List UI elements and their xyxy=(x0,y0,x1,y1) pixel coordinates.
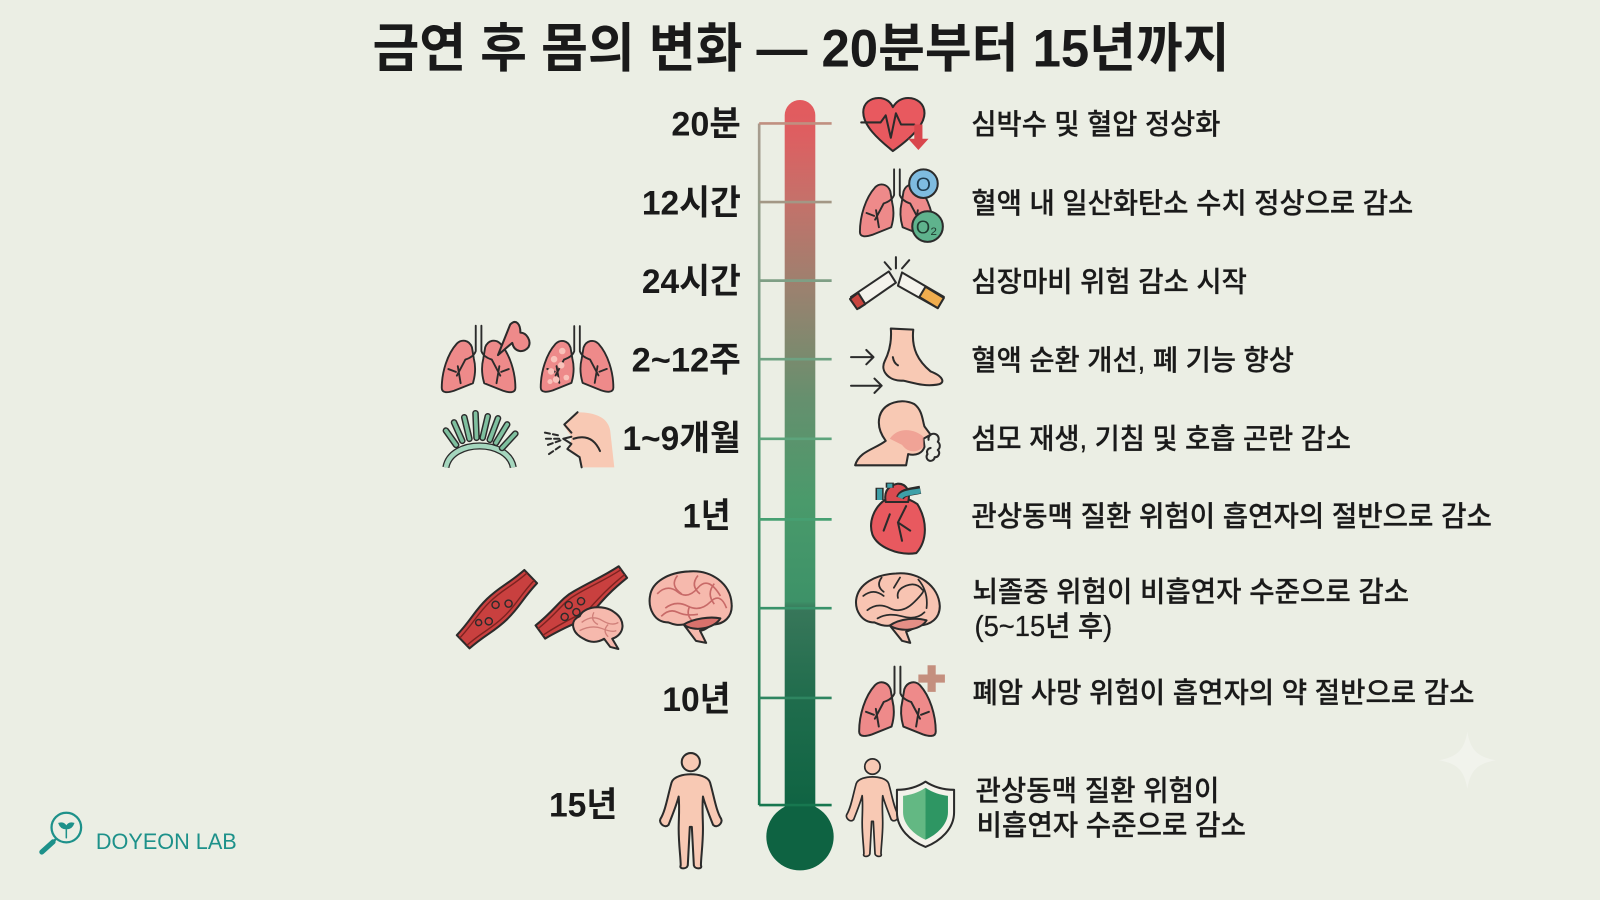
left rail xyxy=(758,123,760,805)
icon: brain right xyxy=(856,573,940,643)
shield xyxy=(897,782,954,847)
label: 24시간: 24시간 xyxy=(642,262,741,301)
icon: nose and mouth profile xyxy=(545,412,614,467)
icon: broken cigarette xyxy=(850,257,944,309)
text: 10 years: 폐암 사망 위험이 흡연자의 약 절반으로 감소 xyxy=(972,678,1474,710)
title: 금연 후 몸의 변화 — 20분부터 15년까지 xyxy=(372,19,1230,78)
logo: DOYEON LAB xyxy=(42,813,237,854)
text: 20 minutes: 심박수 및 혈압 정상화 xyxy=(971,109,1220,141)
text: 24 hours: 심장마비 위험 감소 시작 xyxy=(971,266,1247,298)
text: 15 years: 관상동맥 질환 위험이 xyxy=(976,776,1219,808)
text: 12 hours: 혈액 내 일산화탄소 수치 정상으로 감소 xyxy=(971,188,1413,220)
icon: person xyxy=(660,753,722,868)
icon: person with shield xyxy=(846,759,954,856)
tick marks xyxy=(759,123,832,805)
text: 1-9 months: 섬모 재생, 기침 및 호흡 곤란 감소 xyxy=(971,423,1351,455)
label: 12시간: 12시간 xyxy=(642,183,741,222)
text: 15 years xyxy=(976,776,1246,842)
O2 bubble: O₂ xyxy=(916,217,937,238)
icon: head breathing out xyxy=(855,401,940,465)
icon: foot with circulation arrows xyxy=(851,329,942,393)
thermometer bulb xyxy=(766,803,834,870)
text: 15 years: 비흡연자 수준으로 감소 xyxy=(977,810,1246,842)
label: 1년: 1년 xyxy=(683,498,731,536)
label: 1~9개월: 1~9개월 xyxy=(622,420,741,458)
label: 15년: 15년 xyxy=(549,786,617,824)
logo icon: magnifier with sprout xyxy=(42,813,81,852)
thermometer tube xyxy=(785,100,815,816)
O bubble: O xyxy=(916,174,931,196)
icon: lungs with oxygen bubbles xyxy=(860,169,943,242)
icon: brain left xyxy=(650,571,732,643)
icon: cilia xyxy=(446,413,515,467)
text: 2-12 weeks: 혈액 순환 개선, 폐 기능 향상 xyxy=(971,345,1294,377)
icon: lungs in recovery left xyxy=(442,322,529,392)
icon: heart with ECG and down arrow xyxy=(861,98,929,151)
label: 20분: 20분 xyxy=(671,106,741,144)
icon: lungs with spots xyxy=(541,326,613,392)
icon: lungs with medical cross xyxy=(859,665,945,736)
label: 2~12주: 2~12주 xyxy=(632,341,741,379)
thermometer timeline xyxy=(759,100,834,870)
time labels xyxy=(549,106,741,824)
icon: blood vessel clear xyxy=(453,566,541,652)
label: 10년: 10년 xyxy=(662,681,731,719)
icon: anatomical heart xyxy=(871,483,925,554)
watermark sparkle xyxy=(1439,732,1496,789)
text: stroke risk: (5~15년 후) xyxy=(974,611,1112,643)
descriptions xyxy=(971,109,1492,842)
text: stroke risk: 뇌졸중 위험이 비흡연자 수준으로 감소 xyxy=(972,577,1409,609)
logo text: DOYEON LAB xyxy=(96,829,237,854)
text: 1 year: 관상동맥 질환 위험이 흡연자의 절반으로 감소 xyxy=(971,501,1492,533)
text: stroke risk xyxy=(972,577,1409,643)
icon: blood vessel with small brain xyxy=(532,561,632,649)
